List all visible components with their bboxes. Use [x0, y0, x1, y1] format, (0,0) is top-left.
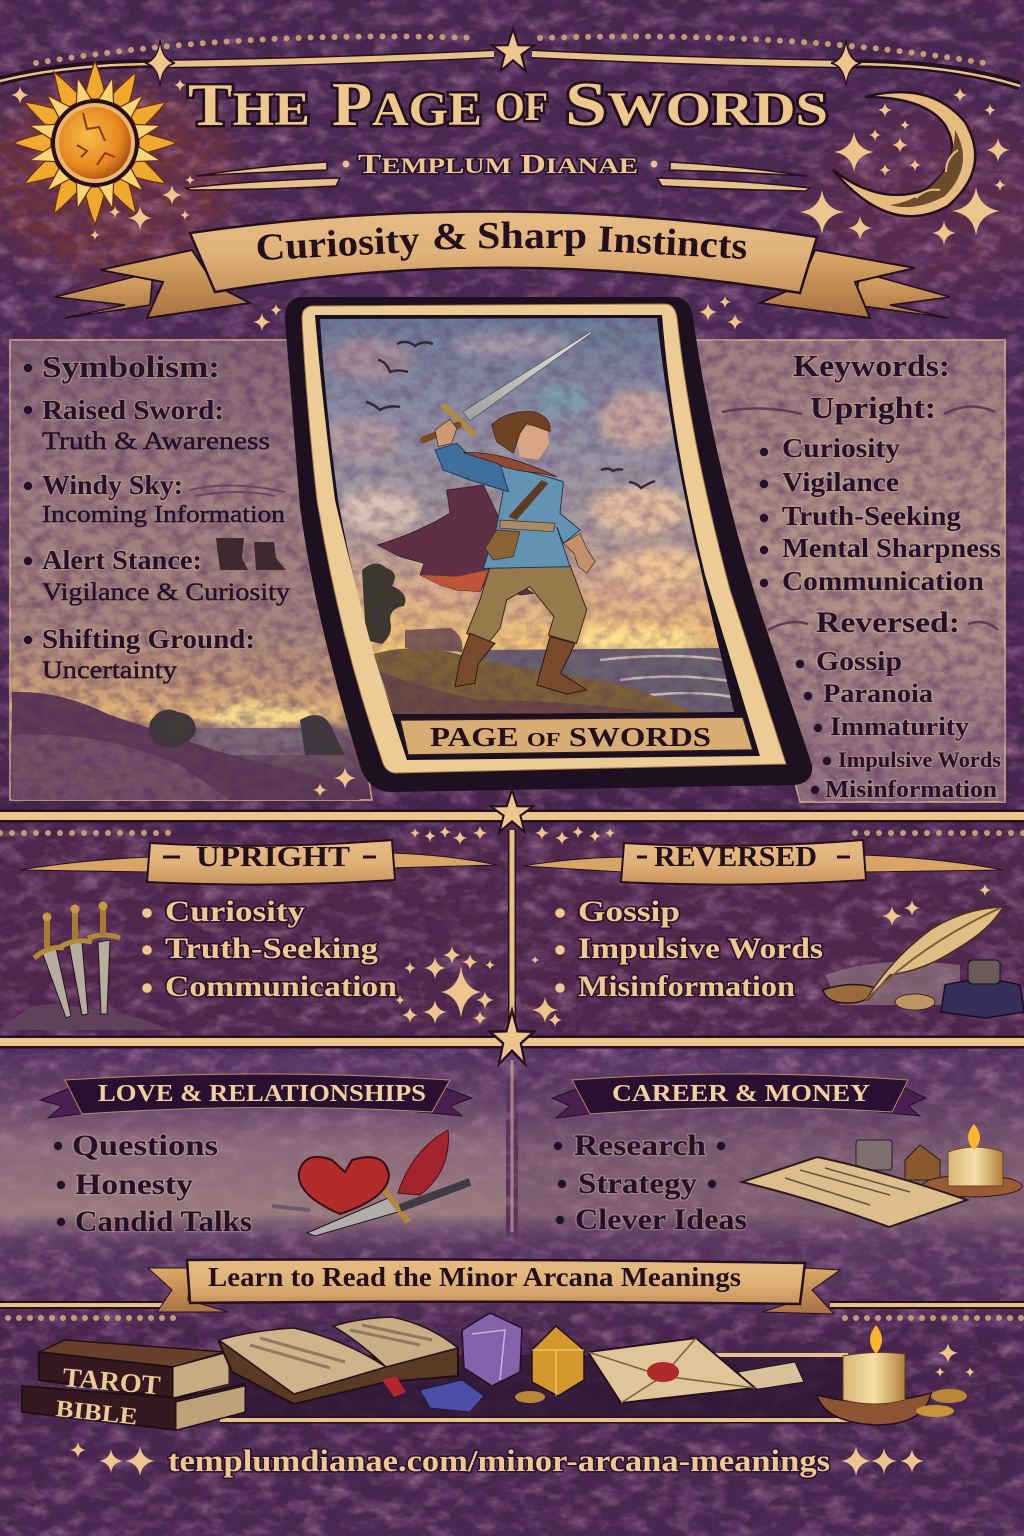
boots — [455, 633, 587, 694]
title: THE — [188, 72, 310, 138]
footer url: templumdianae.com/minor-arcana-meanings — [168, 1443, 830, 1478]
raised arm — [435, 443, 508, 492]
icon: sun — [13, 61, 177, 225]
banner: Curiosity & Sharp Instincts: Sharp — [477, 215, 587, 257]
banner: Curiosity & Sharp Instincts: Curiosity — [255, 219, 421, 269]
icon: candle on dish — [817, 1325, 967, 1425]
icon: blue gem — [420, 1380, 484, 1412]
list: career — [554, 1129, 747, 1236]
pouch — [485, 530, 520, 560]
raised hand — [435, 419, 457, 447]
icon: tarot book: BIBLE — [54, 1396, 139, 1431]
list: reversed — [555, 895, 823, 1003]
banner: upright — [20, 840, 497, 885]
list: career: Strategy — [578, 1167, 697, 1200]
list: reversed: Impulsive Words — [578, 932, 823, 965]
divider: middle — [0, 790, 1024, 1064]
landscape — [10, 340, 372, 800]
item: windy sky: Windy Sky: — [42, 470, 183, 500]
list: upright: Communication — [165, 970, 397, 1003]
icon: three daggers — [0, 902, 170, 1030]
list: reversed keywords — [796, 646, 1001, 803]
sparkles — [935, 1343, 975, 1377]
list: love — [54, 1129, 252, 1238]
banner: love — [40, 1074, 472, 1118]
banner: Curiosity & Sharp Instincts — [55, 211, 950, 318]
item: windy sky: Incoming Information — [42, 502, 285, 528]
item: alert stance: Vigilance & Curiosity — [42, 579, 291, 606]
subtitle — [186, 149, 810, 191]
list: reversed keywords: Immaturity — [830, 712, 969, 741]
banner: career: CAREER & MONEY — [612, 1081, 870, 1107]
list: upright: Truth-Seeking — [165, 932, 378, 965]
banner: learn to read — [0, 1259, 1024, 1314]
list: upright keywords — [760, 433, 1001, 596]
list: career: Research — [574, 1129, 706, 1162]
icon: papers and candle — [742, 1124, 1022, 1227]
bush — [362, 563, 406, 644]
tunic — [483, 463, 580, 568]
panel: reversed — [523, 840, 1024, 1027]
footer url — [70, 1442, 924, 1478]
icon: tarot book — [22, 1340, 245, 1431]
icon: open book — [219, 1317, 458, 1404]
cape — [377, 485, 533, 595]
figure: page with sword — [377, 332, 595, 694]
sword — [463, 332, 592, 421]
banner: upright: UPRIGHT — [196, 841, 350, 873]
icon: sealed envelope — [588, 1338, 804, 1403]
heading: reversed keywords: Reversed: — [816, 606, 960, 639]
banner: career — [552, 1074, 926, 1118]
sparkles near card — [313, 767, 356, 797]
banner: learn to read: Learn to Read the Minor Arcana Meanings — [208, 1262, 741, 1292]
list: love: Honesty — [75, 1168, 193, 1201]
card illustration — [310, 315, 745, 718]
heading: upright keywords: Upright: — [810, 390, 936, 425]
item: windy sky — [24, 470, 285, 528]
card label bar: PAGE OF SWORDS — [430, 722, 711, 752]
forearm and hand — [563, 533, 595, 573]
panel: symbolism — [10, 340, 372, 800]
item: raised sword: Truth & Awareness — [42, 428, 270, 455]
item: raised sword: Raised Sword: — [42, 395, 224, 425]
title: PAGE — [332, 71, 482, 139]
list: reversed: Misinformation — [578, 970, 795, 1003]
list: upright keywords: Mental Sharpness — [782, 533, 1001, 563]
icon: coin — [515, 1391, 545, 1403]
item: shifting ground: Uncertainty — [42, 657, 178, 684]
list: reversed keywords: Gossip — [816, 646, 902, 676]
icon: crescent moon — [800, 88, 1010, 245]
item: shifting ground — [24, 624, 255, 684]
heading: keywords: Keywords: — [793, 348, 950, 383]
list: upright — [142, 895, 397, 1003]
list: upright keywords: Truth-Seeking — [782, 501, 962, 531]
ground — [370, 648, 700, 718]
card label bar — [400, 717, 753, 755]
heading: upright keywords — [722, 390, 995, 425]
sparkles — [531, 884, 991, 1027]
list: upright keywords: Vigilance — [782, 467, 899, 497]
list: reversed keywords: Misinformation — [825, 777, 997, 803]
icon: amber crystal — [532, 1326, 584, 1396]
item: raised sword — [24, 395, 270, 455]
list: upright keywords: Communication — [782, 566, 984, 596]
icon: tarot book: TAROT — [61, 1362, 162, 1401]
list: career: Clever Ideas — [575, 1203, 747, 1236]
list: reversed: Gossip — [578, 895, 680, 928]
scarf — [463, 452, 557, 477]
banner: reversed: REVERSED — [654, 841, 817, 873]
head — [517, 426, 550, 460]
title: OF — [495, 84, 548, 129]
item: alert stance — [24, 538, 291, 606]
banner: reversed — [523, 840, 1003, 885]
list: upright: Curiosity — [165, 895, 305, 928]
title: SWORDS — [565, 71, 828, 139]
title — [188, 71, 828, 139]
sparkles under sun — [11, 79, 743, 331]
belt — [500, 520, 555, 532]
banner: Curiosity & Sharp Instincts: Instincts — [596, 218, 748, 268]
icon: quill and inkwell — [823, 907, 1024, 1018]
banner: Curiosity & Sharp Instincts: & — [432, 216, 468, 258]
vertical divider — [510, 1060, 514, 1232]
tarot card — [285, 297, 812, 792]
item: shifting ground: Shifting Ground: — [42, 624, 255, 654]
sea — [482, 648, 734, 714]
legs — [467, 565, 587, 645]
clouds — [320, 325, 710, 654]
list: love: Candid Talks — [75, 1205, 252, 1238]
banner: love: LOVE & RELATIONSHIPS — [98, 1081, 426, 1107]
icon: heart and dagger — [272, 1130, 470, 1236]
list: reversed keywords: Paranoia — [823, 679, 933, 708]
subtitle: TEMPLUM D IANAE — [358, 149, 638, 179]
heading: symbolism: Symbolism: — [42, 349, 220, 384]
panel: career and money — [518, 1050, 1024, 1255]
list: upright keywords: Curiosity — [782, 433, 901, 463]
top ornamental border — [0, 29, 1020, 86]
sparkles — [395, 946, 495, 1025]
panel: upright — [0, 840, 497, 1030]
panel: love and relationships — [0, 1050, 506, 1255]
bottom still life — [8, 1313, 1024, 1431]
strap — [508, 480, 548, 520]
list: love: Questions — [72, 1129, 218, 1162]
birds — [366, 342, 655, 488]
panel: keywords — [680, 340, 1005, 803]
list: reversed keywords: Impulsive Words — [838, 747, 1001, 772]
heading: reversed keywords — [768, 606, 998, 639]
item: alert stance: Alert Stance: — [42, 545, 202, 575]
icon: purple crystal — [462, 1313, 522, 1386]
